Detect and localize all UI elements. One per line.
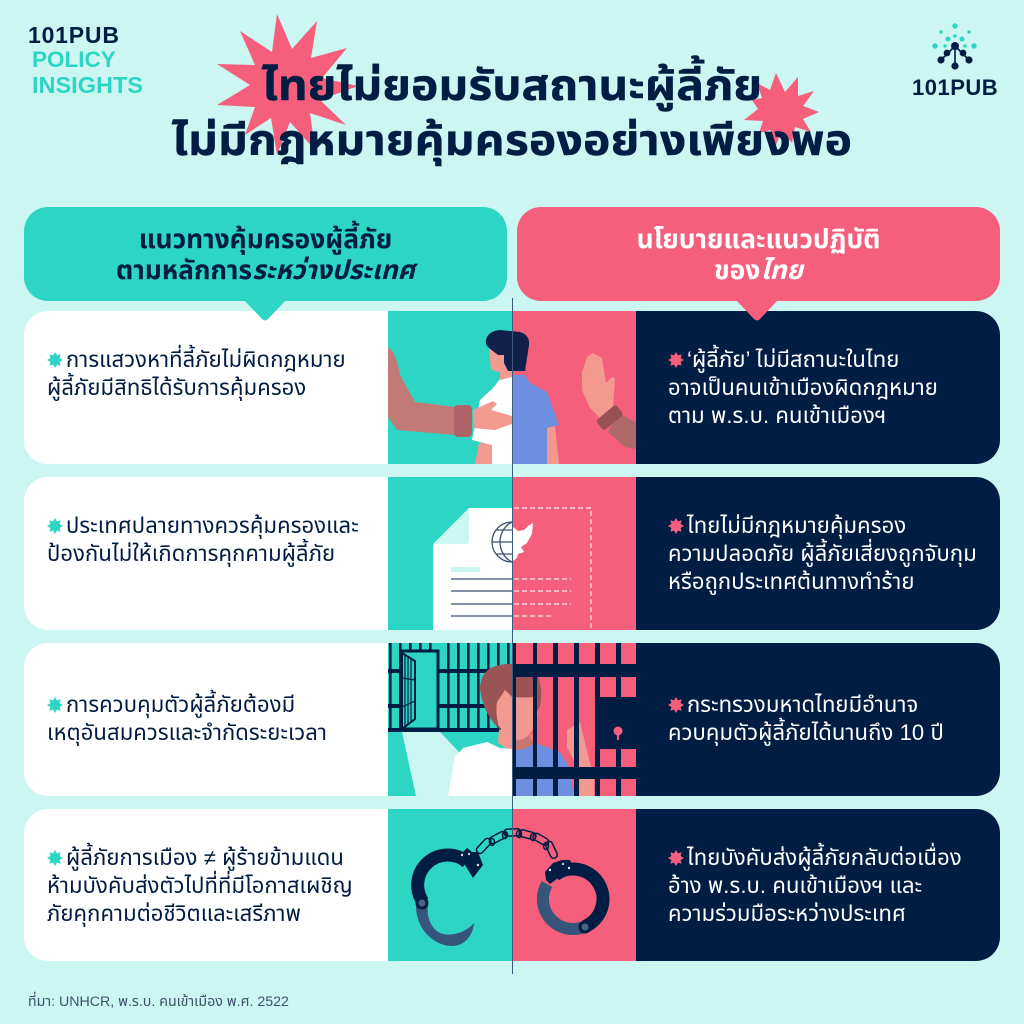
- star bullet: [668, 352, 684, 368]
- right text: ความร่วมมือระหว่างประเทศ: [668, 901, 906, 926]
- illustration: protection vs rejection: [388, 311, 636, 464]
- right text: [668, 344, 938, 428]
- logo: 101PUB network mark: 101PUB: [912, 75, 998, 100]
- right text: หรือถูกประเทศต้นทางทำร้าย: [668, 569, 915, 594]
- illustration: document with globe and bird: [388, 477, 636, 630]
- right text: ไทยบังคับส่งผู้ลี้ภัยกลับต่อเนื่อง: [687, 845, 962, 870]
- right text: ‘ผู้ลี้ภัย’ ไม่มีสถานะในไทย: [687, 347, 899, 372]
- row 4: [24, 809, 1000, 961]
- right text: อาจเป็นคนเข้าเมืองผิดกฎหมาย: [668, 375, 938, 400]
- star bullet: [47, 850, 63, 866]
- panel header: international principles: [24, 207, 507, 301]
- right text panel: [636, 311, 1000, 464]
- left text panel: [24, 643, 388, 796]
- right text: ไทยไม่มีกฎหมายคุ้มครอง: [687, 513, 906, 538]
- row 2: [24, 477, 1000, 630]
- left text: ผู้ลี้ภัยการเมือง ≠ ผู้ร้ายข้ามแดน: [66, 845, 344, 870]
- title: ไม่มีกฎหมายคุ้มครองอย่างเพียงพอ: [172, 117, 852, 165]
- decorative starbursts behind title: [217, 14, 819, 155]
- left text: ภัยคุกคามต่อชีวิตและเสรีภาพ: [47, 901, 301, 926]
- left text: การควบคุมตัวผู้ลี้ภัยต้องมี: [66, 692, 295, 717]
- left text: การแสวงหาที่ลี้ภัยไม่ผิดกฎหมาย: [66, 347, 346, 372]
- illustration: open cell vs locked cell: [388, 643, 636, 796]
- right text: อ้าง พ.ร.บ. คนเข้าเมืองฯ และ: [668, 873, 922, 898]
- header text: [116, 220, 418, 285]
- panel header: Thai policy: [517, 207, 1000, 301]
- header text: แนวทางคุ้มครองผู้ลี้ภัย: [139, 224, 392, 254]
- header text: นโยบายและแนวปฏิบัติ: [637, 224, 880, 254]
- right text: ควบคุมตัวผู้ลี้ภัยได้นานถึง 10 ปี: [668, 720, 944, 745]
- right text panel: [636, 809, 1000, 961]
- left text: ห้ามบังคับส่งตัวไปที่ที่มีโอกาสเผชิญ: [47, 873, 353, 898]
- right text: [668, 842, 962, 926]
- title: [172, 55, 852, 166]
- row 3: [24, 643, 1000, 796]
- left text: [47, 690, 327, 746]
- star bullet: [668, 697, 684, 713]
- star bullet: [47, 518, 63, 534]
- right text: กระทรวงมหาดไทยมีอำนาจ: [687, 692, 918, 717]
- left text: เหตุอันสมควรและจำกัดระยะเวลา: [47, 720, 327, 745]
- logo: 101PUB Policy Insights: POLICY: [32, 47, 116, 72]
- header text: [637, 224, 880, 285]
- star bullet: [47, 697, 63, 713]
- star bullet: [668, 518, 684, 534]
- logo: 101PUB Policy Insights: 101PUB: [28, 22, 120, 48]
- right text: [668, 513, 977, 595]
- star bullet: [47, 352, 63, 368]
- logo: 101PUB Policy Insights: INSIGHTS: [32, 72, 143, 98]
- star bullet: [668, 850, 684, 866]
- left text panel: [24, 477, 388, 630]
- row 1: [24, 311, 1000, 464]
- right text: ความปลอดภัย ผู้ลี้ภัยเสี่ยงถูกจับกุม: [668, 541, 977, 566]
- right text: [668, 692, 944, 746]
- left text: [47, 513, 359, 567]
- right text panel: [636, 477, 1000, 630]
- right text: ตาม พ.ร.บ. คนเข้าเมืองฯ: [668, 403, 886, 428]
- left text: [47, 842, 353, 927]
- left text: ประเทศปลายทางควรคุ้มครองและ: [66, 513, 359, 538]
- illustration: handcuffs: [388, 809, 636, 961]
- left text: ป้องกันไม่ให้เกิดการคุกคามผู้ลี้ภัย: [47, 541, 335, 566]
- right text panel: [636, 643, 1000, 796]
- header pointer: [245, 301, 285, 320]
- header text: ตามหลักการระหว่างประเทศ: [116, 255, 415, 285]
- header pointer: [737, 301, 777, 320]
- logo: 101PUB network mark: [912, 23, 998, 100]
- header text: ของไทย: [714, 255, 803, 285]
- left text panel: [24, 311, 388, 464]
- logo: 101PUB Policy Insights: [28, 22, 143, 98]
- left text: ผู้ลี้ภัยมีสิทธิได้รับการคุ้มครอง: [47, 375, 306, 400]
- left text: [47, 344, 346, 401]
- left text panel: [24, 809, 388, 961]
- source note: ที่มา: UNHCR, พ.ร.บ. คนเข้าเมือง พ.ศ. 2522: [28, 994, 289, 1010]
- title: ไทยไม่ยอมรับสถานะผู้ลี้ภัย: [262, 62, 762, 110]
